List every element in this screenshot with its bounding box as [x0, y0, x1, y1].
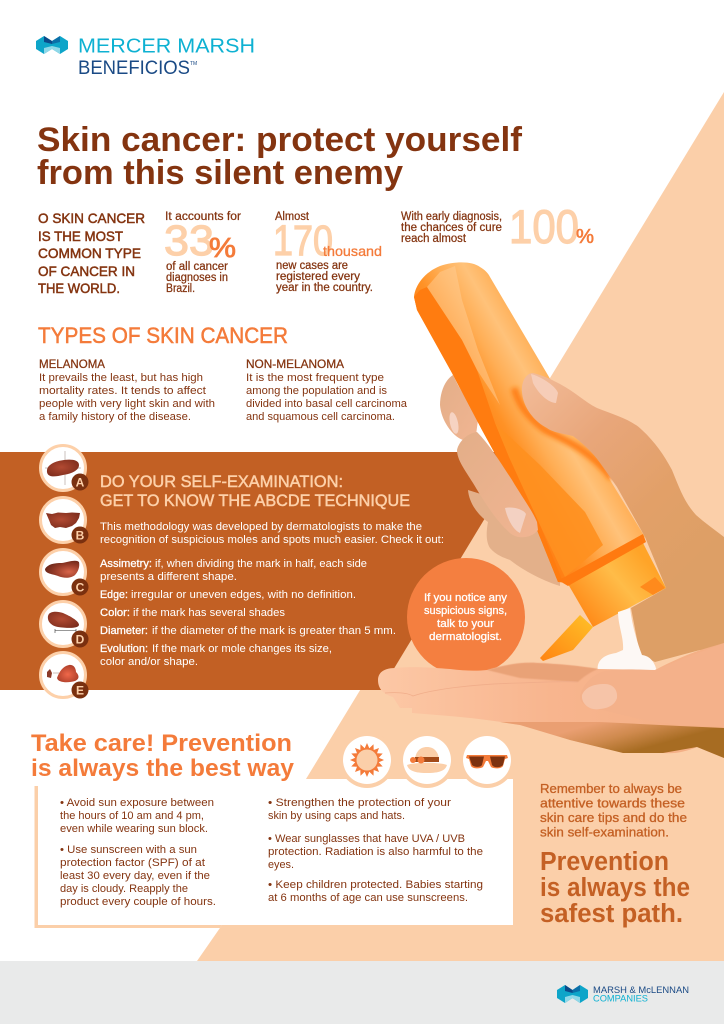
background: peach diagonal shape: [197, 92, 724, 961]
stat: 100%: %: [576, 226, 594, 248]
tips column 1: the hours of 10 am and 4 pm,: [60, 810, 204, 822]
cap tab: [640, 577, 665, 595]
icon: B border mole: [40, 498, 88, 544]
footer logo: Marsh & McLennan Companies: MARSH & McLENNAN: [593, 985, 689, 996]
closing message: [540, 782, 690, 928]
lower thumb: [580, 643, 724, 727]
index fingertip: [440, 375, 478, 440]
footer logo: Marsh & McLennan Companies: [557, 985, 689, 1004]
intro statement: O SKIN CANCER: [38, 210, 145, 226]
icon: D diameter mole: D: [76, 632, 85, 646]
heading: self-examination: GET TO KNOW THE ABCDE TECHNIQUE: [100, 492, 410, 510]
melanoma text block: It prevails the least, but has high: [39, 372, 203, 384]
intro statement: IS THE MOST: [38, 228, 123, 244]
stat: 100%: 100: [509, 200, 579, 253]
non-melanoma text block: among the population and is: [246, 385, 387, 397]
lower thumb nail: [582, 684, 617, 709]
stat: 33%: of all cancer: [166, 261, 228, 273]
heading: self-examination: [100, 473, 410, 510]
title: Skin cancer: protect yourself: [37, 121, 523, 159]
intro statement: THE WORLD.: [38, 280, 120, 296]
ABCDE definitions: Color:: [100, 607, 130, 619]
callout: talk to your dermatologist: suspicious signs,: [424, 605, 507, 617]
footer logo: Marsh & McLennan Companies: COMPANIES: [593, 994, 648, 1004]
reminder text: skin care tips and do the: [540, 811, 687, 825]
ABCDE definitions: presents a different shape.: [100, 571, 237, 583]
title: [37, 121, 523, 192]
bottle shadow near thumb: [514, 388, 612, 478]
finger separation: [385, 682, 578, 696]
lower hand silhouette: [378, 643, 724, 758]
stat: 100%: [401, 200, 594, 253]
tips column 1: product every couple of hours.: [60, 896, 216, 908]
bottle dark side stripe: [414, 287, 562, 582]
tips column 2: • Wear sunglasses that have UVA / UVB: [268, 833, 465, 845]
bottle cap: [568, 543, 666, 627]
icon: A asymmetry mole: A: [76, 476, 85, 490]
stat: 170 thousand: registered every: [276, 271, 360, 283]
melanoma text block: MELANOMA: [39, 359, 105, 371]
heading: types of skin cancer: TYPES OF SKIN CANCER: [38, 323, 288, 348]
middle finger: [457, 432, 538, 537]
icon: sun: [339, 732, 395, 788]
icon: C color mole: C: [76, 580, 85, 594]
stat: 100%: With early diagnosis,: [401, 211, 502, 223]
intro text: This methodology was developed by dermatologists to make the: [100, 521, 422, 533]
lower hand underside shading: [500, 722, 724, 758]
stat: 33%: diagnoses in: [166, 272, 228, 284]
tips column 1: least 30 every day, even if the: [60, 870, 210, 882]
callout: talk to your dermatologist: [407, 558, 525, 676]
stat: 170 thousand: 170: [273, 217, 333, 265]
bottle body: [414, 262, 645, 583]
melanoma text block: a family history of the disease.: [39, 411, 191, 423]
stat: 170 thousand: thousand: [323, 243, 382, 259]
prevention statement: safest path.: [540, 900, 683, 928]
ABCDE definitions: [100, 558, 396, 668]
icon: C color mole: [40, 550, 88, 596]
non-melanoma text block: and squamous cell carcinoma.: [246, 411, 395, 423]
tips column 2: [268, 797, 483, 904]
icon: hat: [399, 732, 455, 788]
prevention statement: [540, 848, 690, 928]
intro text: [100, 521, 444, 546]
reminder text: [540, 782, 687, 840]
tips column 1: day is cloudy. Reapply the: [60, 883, 188, 895]
logo: Mercer Marsh Beneficios: BENEFICIOS: [78, 58, 190, 79]
ABCDE definitions: if, when dividing the mark in half, each side: [155, 558, 367, 570]
icon: A asymmetry mole: [40, 446, 88, 490]
middle nail: [505, 507, 526, 533]
ABCDE definitions: if the mark has several shades: [133, 607, 285, 619]
reminder text: Remember to always be: [540, 782, 682, 796]
tips column 2: eyes.: [268, 859, 294, 871]
callout: talk to your dermatologist: dermatologist.: [429, 631, 502, 643]
prevention statement: Prevention: [540, 848, 669, 876]
tips column 1: even while wearing sun block.: [60, 823, 208, 835]
logo: Mercer Marsh Beneficios: MERCER MARSH: [78, 36, 255, 58]
stat: 170 thousand: Almost: [275, 211, 310, 223]
callout: talk to your dermatologist: talk to your: [437, 618, 494, 630]
tips column 2: protection. Radiation is also harmful to the: [268, 846, 483, 858]
non-melanoma text block: It is the most frequent type: [246, 372, 384, 384]
stat: 33%: Brazil.: [166, 283, 195, 295]
icon: D diameter mole: [40, 602, 88, 648]
non-melanoma text block: divided into basal cell carcinoma: [246, 398, 408, 410]
tips column 1: • Avoid sun exposure between: [60, 797, 214, 809]
stat: 33%: 33: [164, 217, 214, 265]
ABCDE definitions: color and/or shape.: [100, 656, 198, 668]
tips column 2: • Keep children protected. Babies starting: [268, 879, 483, 891]
intro statement: [38, 210, 145, 296]
bottle lower shading: [495, 423, 603, 577]
heading: take care: [31, 730, 294, 782]
illustration: hand squeezing sunscreen bottle: [378, 262, 724, 758]
reminder text: skin self-examination.: [540, 826, 669, 840]
prevention statement: is always the: [540, 874, 690, 902]
ABCDE definitions: irregular or uneven edges, with no definition.: [131, 589, 356, 601]
heading: take care: Take care! Prevention: [31, 730, 292, 757]
stat: 33%: [164, 211, 241, 295]
ABCDE definitions: if the diameter of the mark is greater than 5 mm.: [152, 625, 396, 637]
stat: 100%: reach almost: [401, 233, 467, 245]
stat: 170 thousand: new cases are: [276, 260, 348, 272]
upper hand: thumb, back of hand and wrist: [522, 373, 724, 662]
footer band: [0, 961, 724, 1024]
flip lid: [540, 615, 593, 661]
panel: prevention tips: [34, 786, 483, 928]
logo: Mercer Marsh Beneficios: [36, 36, 255, 79]
tips column 1: protection factor (SPF) of at: [60, 857, 206, 869]
ABCDE definitions: Assimetry:: [100, 558, 152, 570]
stat: 100%: the chances of cure: [401, 222, 502, 234]
bottle base highlight: [427, 266, 500, 405]
ABCDE definitions: Diameter:: [100, 625, 148, 637]
tips column 1: • Use sunscreen with a sun: [60, 844, 197, 856]
non-melanoma text block: NON-MELANOMA: [246, 359, 344, 371]
melanoma text block: [39, 359, 215, 423]
reminder text: attentive towards these: [540, 796, 685, 810]
panel: ABCDE self-examination band: [0, 452, 525, 690]
thumb nail: [531, 374, 558, 403]
melanoma text block: people with very light skin and with: [39, 398, 215, 410]
icon: B border mole: B: [76, 528, 85, 542]
non-melanoma text block: [246, 359, 408, 423]
icon: sunglasses: [459, 732, 515, 788]
stat: 33%: It accounts for: [165, 211, 241, 223]
melanoma text block: mortality rates. It tends to affect: [39, 385, 207, 397]
ABCDE definitions: Evolution:: [100, 643, 148, 655]
ring and little fingers behind bottle: [468, 490, 560, 586]
tips column 2: skin by using caps and hats.: [268, 810, 405, 822]
tips column 2: at 6 months of age can use sunscreens.: [268, 892, 468, 904]
tips column 1: [60, 797, 216, 908]
ABCDE definitions: Edge:: [100, 589, 128, 601]
heading: take care: is always the best way: [31, 755, 294, 782]
stat: 170 thousand: [273, 211, 382, 294]
tips column 2: • Strengthen the protection of your: [268, 797, 451, 809]
intro text: recognition of suspicious moles and spots much easier. Check it out:: [100, 534, 444, 546]
index nail: [448, 411, 460, 435]
intro statement: OF CANCER IN: [38, 263, 135, 279]
callout: talk to your dermatologist: If you notice any: [424, 592, 507, 604]
palm shadow: [487, 663, 598, 682]
title: from this silent enemy: [37, 154, 403, 192]
icon: E evolution mole: E: [76, 684, 84, 698]
bottle collar: [558, 534, 646, 586]
logo: Mercer Marsh Beneficios: TM: [190, 61, 197, 67]
ABCDE definitions: If the mark or mole changes its size,: [152, 643, 332, 655]
heading: self-examination: DO YOUR SELF-EXAMINATION:: [100, 473, 343, 491]
stat: 170 thousand: year in the country.: [276, 282, 373, 294]
stat: 33%: %: [209, 232, 236, 263]
cream: [598, 608, 657, 672]
icon: E evolution mole: [40, 652, 88, 698]
intro statement: COMMON TYPE: [38, 245, 141, 261]
